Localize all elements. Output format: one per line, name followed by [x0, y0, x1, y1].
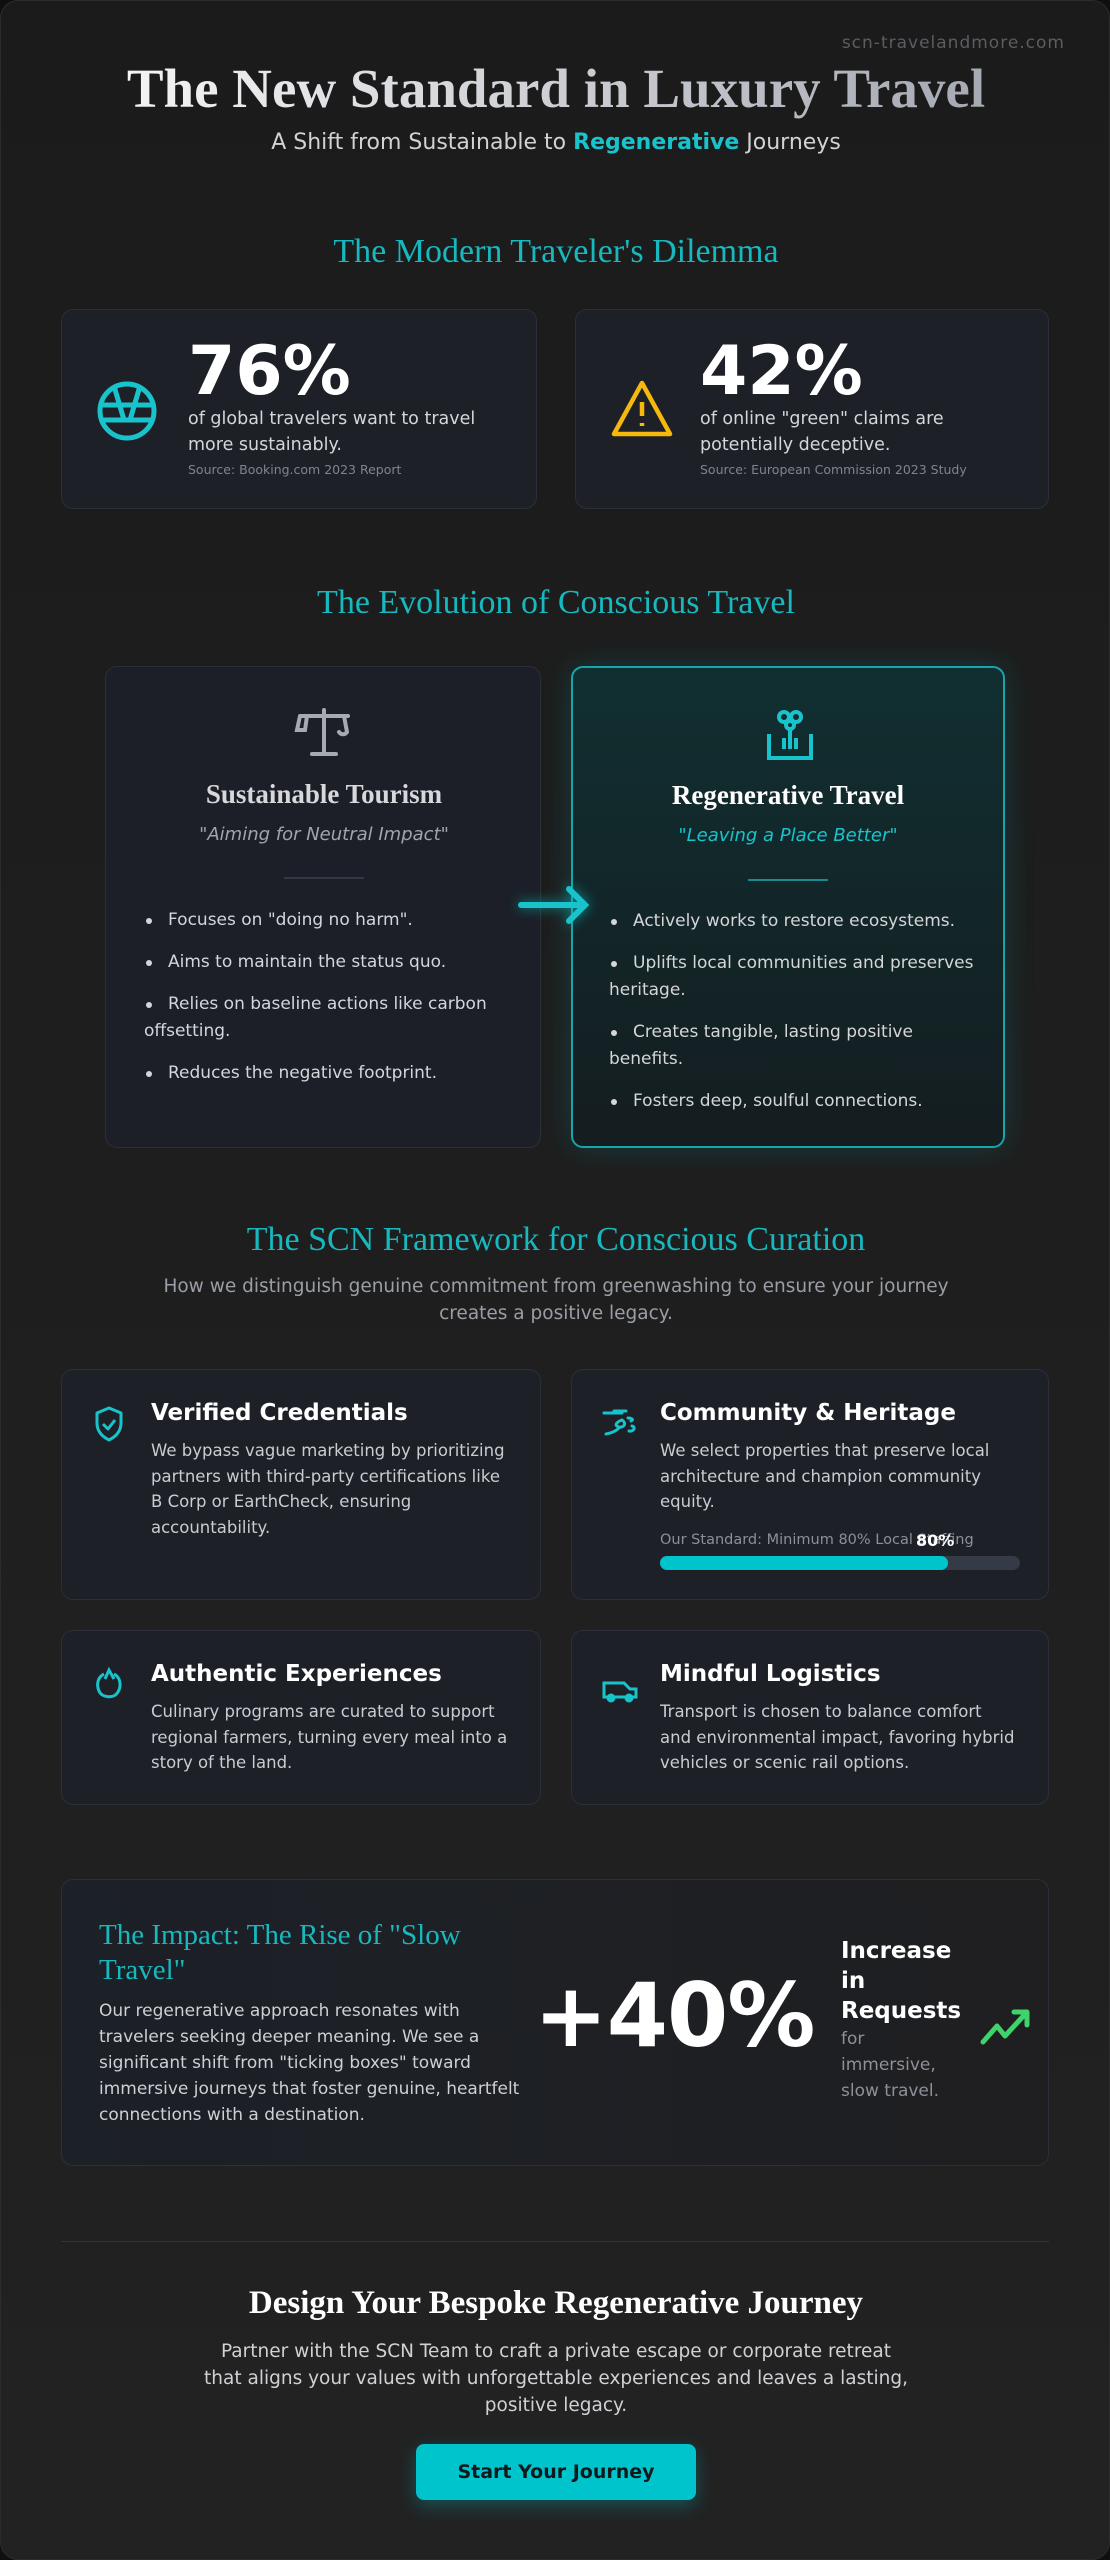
progress bar: 80% local staffing: 80% [916, 1531, 954, 1550]
title: The New Standard in Luxury Travel [127, 58, 985, 119]
bullet list: Reduces the negative footprint. [168, 1063, 437, 1083]
card body: Transport is chosen to balance comfort and environmental impact, favoring hybrid vehicles or scenic rail options. [660, 1702, 1014, 1772]
impact body: Our regenerative approach resonates with travelers seeking deeper meaning. We see a significant shift from "ticking boxes" toward immersive journeys that foster genuine, heartfelt connections with a destination. [99, 2001, 519, 2125]
CTA text: Partner with the SCN Team to craft a private escape or corporate retreat that aligns your values with unforgettable experiences and leaves a lasting, positive legacy. [204, 2341, 908, 2416]
CTA button: Start Your Journey [457, 2461, 655, 2483]
stat card: 76% [61, 309, 537, 509]
panel: regenerative travel [571, 666, 1005, 1148]
icon: shield [96, 1406, 122, 1442]
stat label: Increase in Requests [841, 1938, 961, 2024]
bullet list: Relies on baseline actions like carbon offsetting. [144, 994, 487, 1041]
heading: evolution: The Evolution of Conscious Travel [317, 584, 795, 621]
arrow: evolution [514, 882, 594, 928]
card title: Sustainable Tourism [206, 779, 442, 809]
stat description: of online "green" claims are potentially deceptive. [700, 409, 944, 455]
stat value: 76% [188, 332, 351, 411]
stat card: 42% [575, 309, 1049, 509]
bullet list: Focuses on "doing no harm". [168, 910, 413, 930]
bullet list: Actively works to restore ecosystems. [633, 911, 955, 931]
icon: trending up [980, 2010, 1030, 2044]
icon: community [602, 1410, 636, 1436]
card: authentic experiences [61, 1630, 541, 1805]
CTA heading: Design Your Bespoke Regenerative Journey [249, 2285, 863, 2321]
framework intro: How we distinguish genuine commitment from greenwashing to ensure your journey creates a positive legacy. [163, 1276, 949, 1324]
stat label: for immersive, slow travel. [841, 2029, 939, 2101]
CTA button [416, 2444, 696, 2500]
icon: vehicle [602, 1682, 638, 1702]
impact heading: The Impact: The Rise of "Slow Travel" [99, 1919, 461, 1986]
card title: Verified Credentials [151, 1400, 408, 1426]
icon: warning [612, 380, 672, 436]
subtitle: A Shift from Sustainable to Regenerative Journeys [271, 130, 841, 155]
card body: We bypass vague marketing by prioritizing partners with third-party certifications like B Corp or EarthCheck, ensuring accountability. [151, 1441, 505, 1536]
progress bar: 80% local staffing: Our Standard: Minimum 80% Local Staffing [660, 1532, 974, 1548]
bullet list: Fosters deep, soulful connections. [633, 1091, 923, 1111]
icon: globe [98, 382, 156, 440]
card: mindful logistics [571, 1630, 1049, 1805]
bullet list: Uplifts local communities and preserves heritage. [609, 953, 974, 1000]
card: community & heritage [571, 1369, 1049, 1600]
card: verified credentials [61, 1369, 541, 1600]
card tagline: "Aiming for Neutral Impact" [199, 824, 449, 845]
icon: plant [767, 710, 813, 760]
big stat +40%: +40% [534, 1964, 814, 2067]
icon: fruit [96, 1667, 122, 1698]
card title: Authentic Experiences [151, 1661, 442, 1687]
card body: Culinary programs are curated to support regional farmers, turning every meal into a story of the land. [151, 1702, 507, 1772]
stat value: 42% [700, 332, 863, 411]
bullet list: Aims to maintain the status quo. [168, 952, 446, 972]
source: Source: Booking.com 2023 Report [188, 462, 401, 477]
progress bar: 80% local staffing [660, 1531, 1020, 1570]
stat label [841, 1938, 961, 2101]
icon: scales [294, 708, 350, 756]
bullet list [144, 910, 487, 1083]
panel: impact [61, 1879, 1049, 2166]
panel: sustainable tourism [105, 666, 541, 1148]
heading: framework: The SCN Framework for Conscious Curation [247, 1221, 865, 1258]
bullet list [609, 911, 974, 1111]
bullet list: Creates tangible, lasting positive benefits. [609, 1022, 913, 1069]
card title: Community & Heritage [660, 1400, 956, 1426]
card title: Mindful Logistics [660, 1661, 881, 1687]
card tagline: "Leaving a Place Better" [678, 825, 898, 846]
card body: We select properties that preserve local architecture and champion community equity. [660, 1441, 989, 1511]
stat description: of global travelers want to travel more sustainably. [188, 409, 475, 455]
watermark: scn-travelandmore.com [842, 33, 1065, 53]
card title: Regenerative Travel [672, 780, 904, 810]
heading: dilemma: The Modern Traveler's Dilemma [333, 233, 779, 270]
source: Source: European Commission 2023 Study [700, 462, 967, 477]
